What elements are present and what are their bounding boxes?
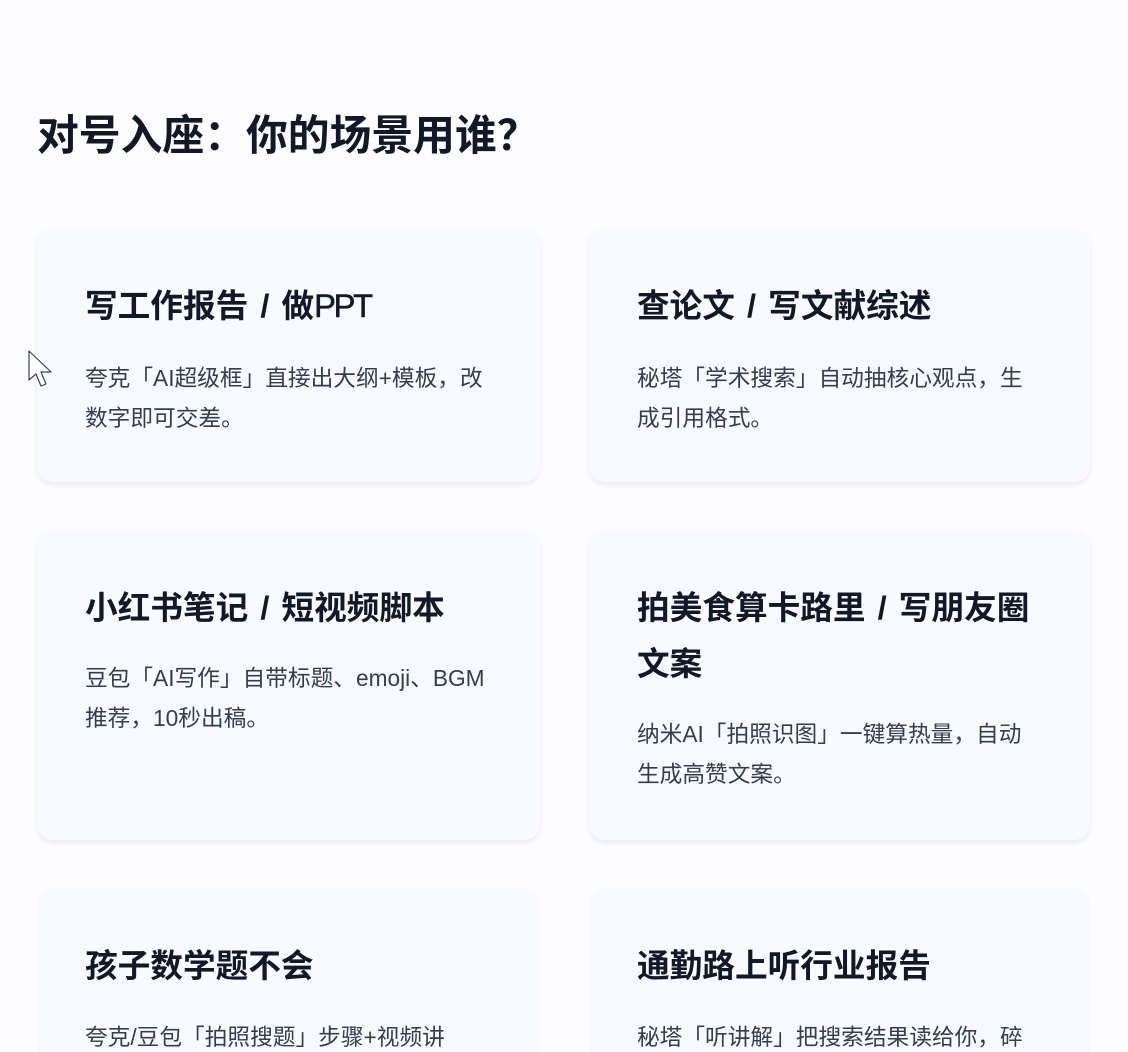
text: Metaso academic search: 秘塔「学术搜索」自动抽核心观点，生 [637,365,1023,391]
title: 对号入座：你的场景用谁？ [37,112,539,159]
text: Quark recommendation: 夸克「AI超级框」直接出大纲+模板，改 [85,365,483,391]
heading: papers and literature review: 查论文 / 写文献综述 [637,287,931,324]
heading: work reports and PPT: 写工作报告 / 做PPT [85,287,371,324]
heading: child's math homework: 孩子数学题不会 [85,947,314,984]
text: Metaso academic search: 成引用格式。 [637,405,773,431]
heading: food calories and social captions: 文案 [637,645,702,682]
text: Quark and Doubao photo search: 夸克/豆包「拍照搜题」步骤+视频讲 [85,1024,445,1050]
heading: food calories and social captions: 拍美食算卡路里 / 写朋友圈 [637,589,1029,626]
text: Doubao AI writing: 推荐，10秒出稿。 [85,705,269,731]
panel: Xiaohongshu notes and video scripts [37,530,540,840]
text: Doubao AI writing [85,665,485,731]
panel: papers and literature review [589,228,1090,482]
text: Nami AI photo recognition: 纳米AI「拍照识图」一键算热量，自动 [637,721,1021,747]
icon: mouse cursor [28,350,52,387]
heading: food calories and social captions [637,589,1029,682]
text: Quark recommendation [85,365,483,431]
heading: Xiaohongshu notes and video scripts: 小红书笔记 / 短视频脚本 [85,589,445,626]
text: Nami AI photo recognition [637,721,1021,787]
text: Doubao AI writing: 豆包「AI写作」自带标题、emoji、BGM [85,665,485,691]
text: Quark recommendation: 数字即可交差。 [85,405,244,431]
text: Metaso listen feature: 秘塔「听讲解」把搜索结果读给你，碎 [637,1024,1023,1050]
heading: commute industry reports: 通勤路上听行业报告 [637,947,931,984]
text: Metaso academic search [637,365,1023,431]
panel: work reports and PPT [37,228,540,482]
panel: child's math homework [37,888,540,1052]
panel: commute industry reports [589,888,1090,1052]
text: Nami AI photo recognition: 生成高赞文案。 [637,761,796,787]
panel: food calories and social captions [589,530,1090,840]
